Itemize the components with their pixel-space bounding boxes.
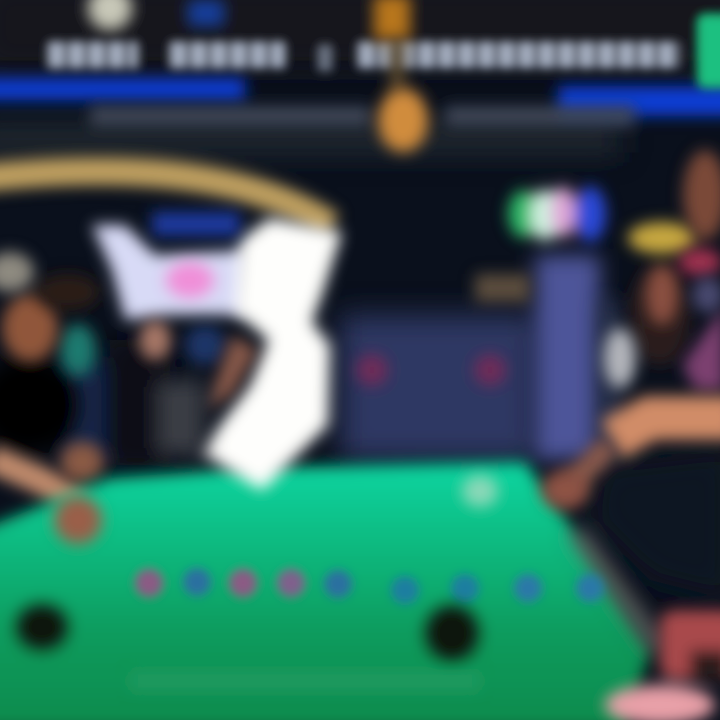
- top dark band: [0, 0, 720, 70]
- gold column: [374, 0, 410, 40]
- forearm upper: [60, 442, 104, 482]
- felt lower band: [130, 672, 480, 690]
- player head: [2, 294, 58, 362]
- red sleeve: [678, 248, 720, 276]
- wrist: [570, 445, 610, 485]
- betting chip row: [135, 568, 604, 604]
- wall panel: [340, 315, 535, 460]
- gold stem: [390, 40, 404, 90]
- background person: [110, 340, 170, 465]
- blue column: [535, 255, 600, 460]
- woman face: [646, 265, 678, 325]
- big white number: [92, 212, 342, 490]
- navy background: [60, 360, 120, 460]
- top banner: [0, 0, 720, 152]
- blue badge top: [152, 212, 240, 236]
- blue shade: [692, 277, 720, 313]
- gold arc: [0, 171, 332, 226]
- blurred subheading: [90, 106, 635, 126]
- arm: [0, 458, 85, 505]
- blue stripe left: [0, 78, 245, 100]
- right hand: [541, 470, 589, 510]
- blue figure: [185, 325, 225, 365]
- gold lamp: [378, 88, 428, 152]
- pink badge: [166, 262, 214, 298]
- grey hat: [0, 252, 34, 292]
- tan sign: [475, 274, 530, 302]
- felt table: [0, 462, 650, 720]
- left hand: [54, 496, 102, 544]
- pocket left: [16, 604, 68, 650]
- teal collar: [60, 324, 96, 376]
- gold hat: [628, 222, 696, 254]
- seated woman: [630, 265, 690, 365]
- wall lights: [356, 354, 506, 386]
- left player: [0, 252, 170, 505]
- grey ceiling band: [0, 125, 620, 153]
- player torso: [0, 357, 78, 453]
- brown figure: [205, 335, 258, 410]
- striped shirt: [682, 305, 720, 390]
- lavender left part: [92, 225, 250, 320]
- white body: [200, 218, 342, 490]
- green corner logo: [697, 14, 720, 88]
- dark lower body: [590, 450, 720, 600]
- blue stripe right: [558, 86, 720, 116]
- skin figure: [139, 320, 171, 360]
- felt edge: [575, 530, 660, 650]
- grey figure: [155, 380, 205, 455]
- white top: [604, 328, 636, 388]
- back wall: [0, 0, 720, 460]
- flag sign: [508, 186, 606, 242]
- top spotlight: [88, 0, 132, 30]
- blurred headline: [48, 55, 680, 58]
- pocket right: [425, 605, 479, 661]
- pink foreground object: [605, 610, 720, 720]
- forearm: [612, 418, 720, 440]
- hair: [36, 274, 100, 310]
- white chip on felt: [462, 475, 498, 507]
- table markings: [16, 475, 604, 690]
- standing man head: [683, 150, 720, 240]
- right player: [541, 150, 720, 600]
- column shade: [600, 300, 620, 460]
- top blue accent: [188, 0, 224, 26]
